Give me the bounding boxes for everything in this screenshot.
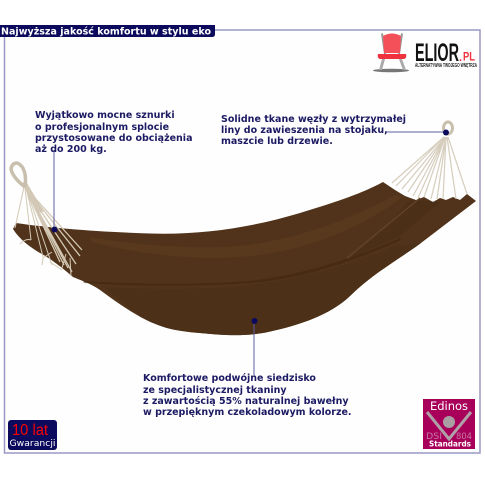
text block: ropes: aż do 200 kg. [35,144,107,155]
logo: Elior: . [459,52,462,64]
text block: seat: Komfortowe podwójne siedzisko [143,373,316,384]
logo: Elior: PL [463,50,475,64]
callout: knots [221,114,449,147]
icon: left loop [11,163,26,187]
text block: knots: liny do zawieszenia na stojaku, [221,125,388,136]
badge: Edinos standards: Edinos [430,399,468,413]
badge: Edinos standards: Standards [429,440,471,448]
hammock [11,122,476,335]
text block: seat: w przepięknym czekoladowym kolorze. [143,407,352,418]
badge: Edinos standards: 804 [456,432,472,442]
hammock fold shadow [83,238,401,286]
badge: Edinos standards [423,399,475,449]
badge: guarantee [8,420,57,450]
text block: ropes: Wyjątkowo mocne sznurki [35,110,175,121]
icon: chair [373,33,409,72]
hammock upper light band [90,195,403,258]
text block: knots: maszcie lub drzewie. [221,136,333,147]
badge: Edinos standards: DSI [426,432,442,442]
text block: seat: z zawartością 55% naturalnej bawełny [143,396,349,407]
callout: seat [143,318,352,418]
hammock right pleats [350,200,440,258]
badge: guarantee: Gwarancji [10,439,55,449]
logo: Elior [373,33,477,72]
hammock left ropes [11,163,82,276]
badge: guarantee: 10 lat [12,422,49,439]
hammock fabric [13,182,476,335]
text block: knots: Solidne tkane węzły z wytrzymałej [221,114,406,125]
text block: ropes: o profesjonalnym splocie [35,122,169,133]
hammock lower darker fold [105,243,421,335]
text block: seat: ze specjalistycznej tkaniny [143,385,287,396]
title: Najwyższa jakość komfortu w stylu eko [1,26,211,38]
icon: right loop [444,122,452,134]
text block: ropes: przystosowane do obciążenia [35,133,192,144]
hammock right ropes [392,122,467,199]
callout: ropes [35,110,192,232]
